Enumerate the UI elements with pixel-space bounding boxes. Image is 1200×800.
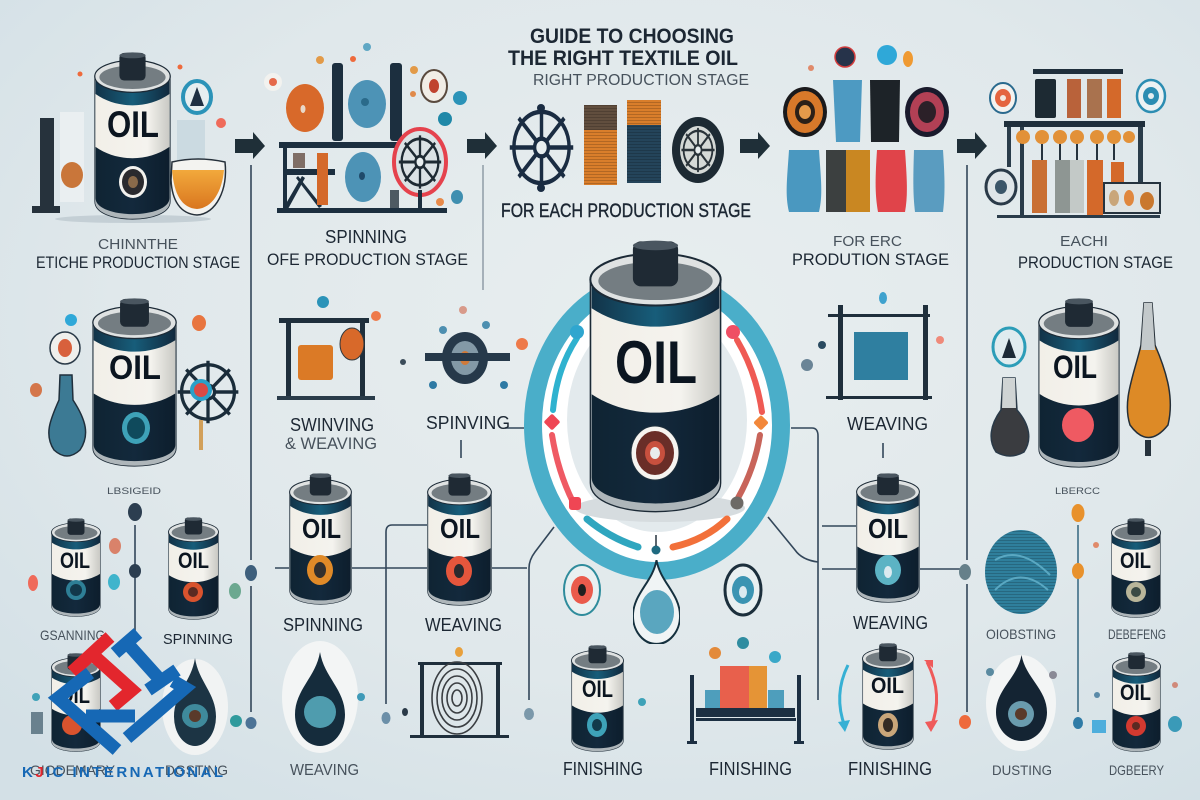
arrow 1 bbox=[235, 132, 265, 159]
flow nodes bbox=[128, 503, 1084, 729]
icon: weaving can right bbox=[857, 473, 919, 602]
icon: bottle bbox=[49, 375, 86, 456]
panel: right cans bbox=[1092, 518, 1182, 752]
logo mark bbox=[58, 633, 185, 750]
icon: blue thread bbox=[854, 332, 908, 380]
labels: row 3 left: GSANNING bbox=[40, 627, 105, 643]
arrow 3 bbox=[740, 132, 770, 159]
icon: left gauge bbox=[986, 170, 1016, 204]
labels: row 4 left: GIODEMARY bbox=[30, 762, 116, 778]
panel: stage 5 spindle rack bbox=[986, 69, 1165, 218]
icon: blue disc lower bbox=[345, 152, 381, 202]
title: THE RIGHT TEXTILE OIL bbox=[508, 47, 738, 70]
panel: stage 1 oil can and tools bbox=[32, 52, 226, 223]
icon: red target bbox=[990, 83, 1016, 113]
icon: can spinning: OIL bbox=[302, 513, 341, 544]
icon: blue target bbox=[1137, 80, 1165, 112]
label: stage 5 bbox=[1018, 233, 1173, 272]
panel: row 2 loom bbox=[277, 296, 381, 400]
icon: clear bottle bbox=[991, 378, 1029, 456]
icon: frame bbox=[277, 63, 447, 213]
logo: KJC International bbox=[22, 633, 223, 781]
label: stage 5: EACHI bbox=[1060, 233, 1108, 250]
labels: row 4 left bbox=[30, 762, 228, 778]
icon: oil can: OIL bbox=[109, 349, 161, 387]
labels: bottom middle: WEAVING bbox=[290, 762, 359, 779]
icon: finishing can with cycle arrows: OIL bbox=[871, 673, 904, 698]
title: GUIDE TO CHOOSING bbox=[530, 25, 734, 48]
ring nodes bbox=[544, 325, 769, 554]
icon: teal badge bbox=[993, 328, 1025, 366]
icon: orange disc bbox=[286, 84, 324, 132]
icon: red wheel bbox=[394, 129, 446, 195]
label: stage 4: FOR ERC bbox=[833, 233, 902, 250]
icon: orange bottle bbox=[1127, 303, 1170, 438]
labels: row 2: SWINVING bbox=[290, 415, 374, 435]
icon: finishing can bbox=[572, 645, 646, 751]
labels: middle cans bbox=[283, 615, 502, 635]
panel: row 2 left can, bottle and wheel bbox=[30, 298, 238, 466]
icon: oil can bbox=[93, 298, 176, 466]
icon: oil can bbox=[95, 52, 170, 219]
labels: bottom middle: FINISHING bbox=[563, 759, 643, 779]
icon: badge bbox=[183, 81, 211, 113]
labels: bottom middle: FINISHING bbox=[709, 759, 792, 779]
icon: orange bowl bbox=[171, 159, 225, 215]
icon: large oil can: OIL bbox=[615, 329, 697, 396]
panel: stage 4 yarn rolls bbox=[783, 45, 949, 212]
icon: orange spool bbox=[584, 105, 617, 185]
labels: right: DGBEERY bbox=[1109, 762, 1165, 778]
icon: large drop with halo bbox=[282, 641, 365, 753]
icon: blue disc bbox=[348, 80, 386, 128]
icon: small can J bbox=[1112, 652, 1161, 752]
labels: middle cans: SPINNING bbox=[283, 615, 363, 635]
icon: small can I: OIL bbox=[1120, 548, 1151, 573]
icon: pump bbox=[32, 118, 60, 213]
icon: black wheel bbox=[672, 117, 724, 183]
labels: row 2: SPINVING bbox=[426, 413, 510, 433]
panel: stage 2 spinning machine bbox=[264, 43, 467, 213]
panel: right loom bbox=[801, 292, 944, 400]
title: FOR EACH PRODUCTION STAGE bbox=[501, 201, 751, 222]
ring bbox=[533, 279, 781, 571]
label: stage 2 bbox=[267, 227, 468, 269]
icon: small can B bbox=[169, 517, 218, 619]
labels: right: OIOBSTING bbox=[986, 626, 1056, 642]
icon: yarn cylinders bbox=[787, 80, 944, 212]
icon: small can B: OIL bbox=[178, 548, 209, 573]
label: stage 2: OFE PRODUCTION STAGE bbox=[267, 250, 468, 269]
panel: row 4 left can and drop bbox=[31, 653, 242, 755]
icon: finishing can with cycle arrows bbox=[838, 643, 938, 749]
ring arcs bbox=[552, 338, 762, 547]
icon: top rail bbox=[1033, 69, 1123, 118]
labels: row 2: WEAVING bbox=[847, 414, 928, 434]
panel: central oil can and ring bbox=[533, 241, 781, 644]
labels: row 3 left: SPINNING bbox=[163, 631, 233, 648]
panel: middle cans bbox=[290, 473, 491, 605]
label: stage 1: ETICHE PRODUCTION STAGE bbox=[36, 253, 240, 272]
icon: oil can bbox=[1039, 298, 1119, 467]
icon: can weaving: OIL bbox=[440, 513, 480, 544]
flow lines and connectors bbox=[135, 165, 1078, 712]
label: stage 1: CHINNTHE bbox=[98, 236, 178, 253]
icon: rack frame bbox=[997, 121, 1160, 218]
icon: spiral frame bbox=[402, 647, 509, 738]
title bbox=[501, 25, 751, 222]
labels: row 4 left: DGSTING bbox=[165, 762, 228, 778]
label: stage 2: SPINNING bbox=[325, 227, 407, 247]
icon: oil can: OIL bbox=[107, 104, 159, 145]
icon: red roll bbox=[905, 87, 949, 137]
icon: can weaving bbox=[428, 473, 491, 605]
icon: orange spool bbox=[298, 345, 333, 380]
title: RIGHT PRODUCTION STAGE bbox=[533, 72, 749, 89]
icon: red circle badge bbox=[564, 565, 600, 615]
label: stage 4: PRODUTION STAGE bbox=[792, 250, 949, 269]
icon: small can A: OIL bbox=[60, 548, 90, 573]
logo name: KJIC INTERNATIONAL bbox=[22, 764, 223, 781]
icon: small can C bbox=[52, 653, 100, 752]
labels: row 2 bbox=[285, 413, 928, 453]
icon: orange roll bbox=[783, 87, 827, 137]
icon: weaving can right: OIL bbox=[868, 513, 908, 544]
panel: row 3 left cans bbox=[28, 517, 241, 619]
icon: orange disc bbox=[340, 328, 364, 360]
icon: drop circle badge bbox=[725, 565, 761, 615]
label: stage 1 bbox=[36, 236, 240, 272]
icon: blue and orange spool bbox=[627, 100, 661, 183]
icon: small can C: OIL bbox=[59, 683, 90, 708]
arrow 2 bbox=[467, 132, 497, 159]
icon: yarn ball bbox=[985, 530, 1057, 614]
labels: right bbox=[986, 486, 1166, 778]
label: stage 5: PRODUCTION STAGE bbox=[1018, 253, 1173, 272]
icon: small can I bbox=[1112, 518, 1160, 618]
icon: finishing bench bbox=[687, 637, 804, 744]
icon: dark wheel bbox=[510, 104, 573, 192]
icon: small can J: OIL bbox=[1120, 680, 1151, 705]
icon: water drop bbox=[633, 560, 680, 644]
labels: row 3 left bbox=[40, 627, 233, 648]
icon: oil can: OIL bbox=[1053, 349, 1097, 385]
icon: dark drop bbox=[162, 658, 228, 755]
labels: row 2: & WEAVING bbox=[285, 434, 377, 453]
label: weaving right: WEAVING bbox=[853, 613, 928, 633]
label: row 2 small: LBSIGEID bbox=[107, 486, 162, 496]
panel: stage 3 wheels and spools bbox=[510, 100, 724, 192]
icon: can spinning bbox=[290, 473, 351, 604]
icon: finishing can: OIL bbox=[582, 676, 613, 703]
arrow 4 bbox=[957, 132, 987, 159]
labels: right: DEBEFENG bbox=[1108, 626, 1166, 642]
labels: right: LBERCC bbox=[1055, 486, 1101, 496]
icon: wheel bbox=[178, 361, 238, 423]
labels: bottom middle: FINISHING bbox=[848, 759, 932, 779]
icon: top drop bbox=[879, 292, 887, 304]
panel: right can and bottles bbox=[991, 298, 1170, 467]
icon: dark drop right bbox=[986, 655, 1057, 751]
labels: right: DUSTING bbox=[992, 762, 1052, 778]
label: stage 4 bbox=[792, 233, 949, 269]
labels: middle cans: WEAVING bbox=[425, 615, 502, 635]
panel: row 2 device bbox=[400, 306, 528, 389]
icon: small can A bbox=[52, 518, 100, 617]
labels: bottom middle bbox=[290, 759, 932, 779]
icon: large oil can bbox=[590, 241, 721, 512]
